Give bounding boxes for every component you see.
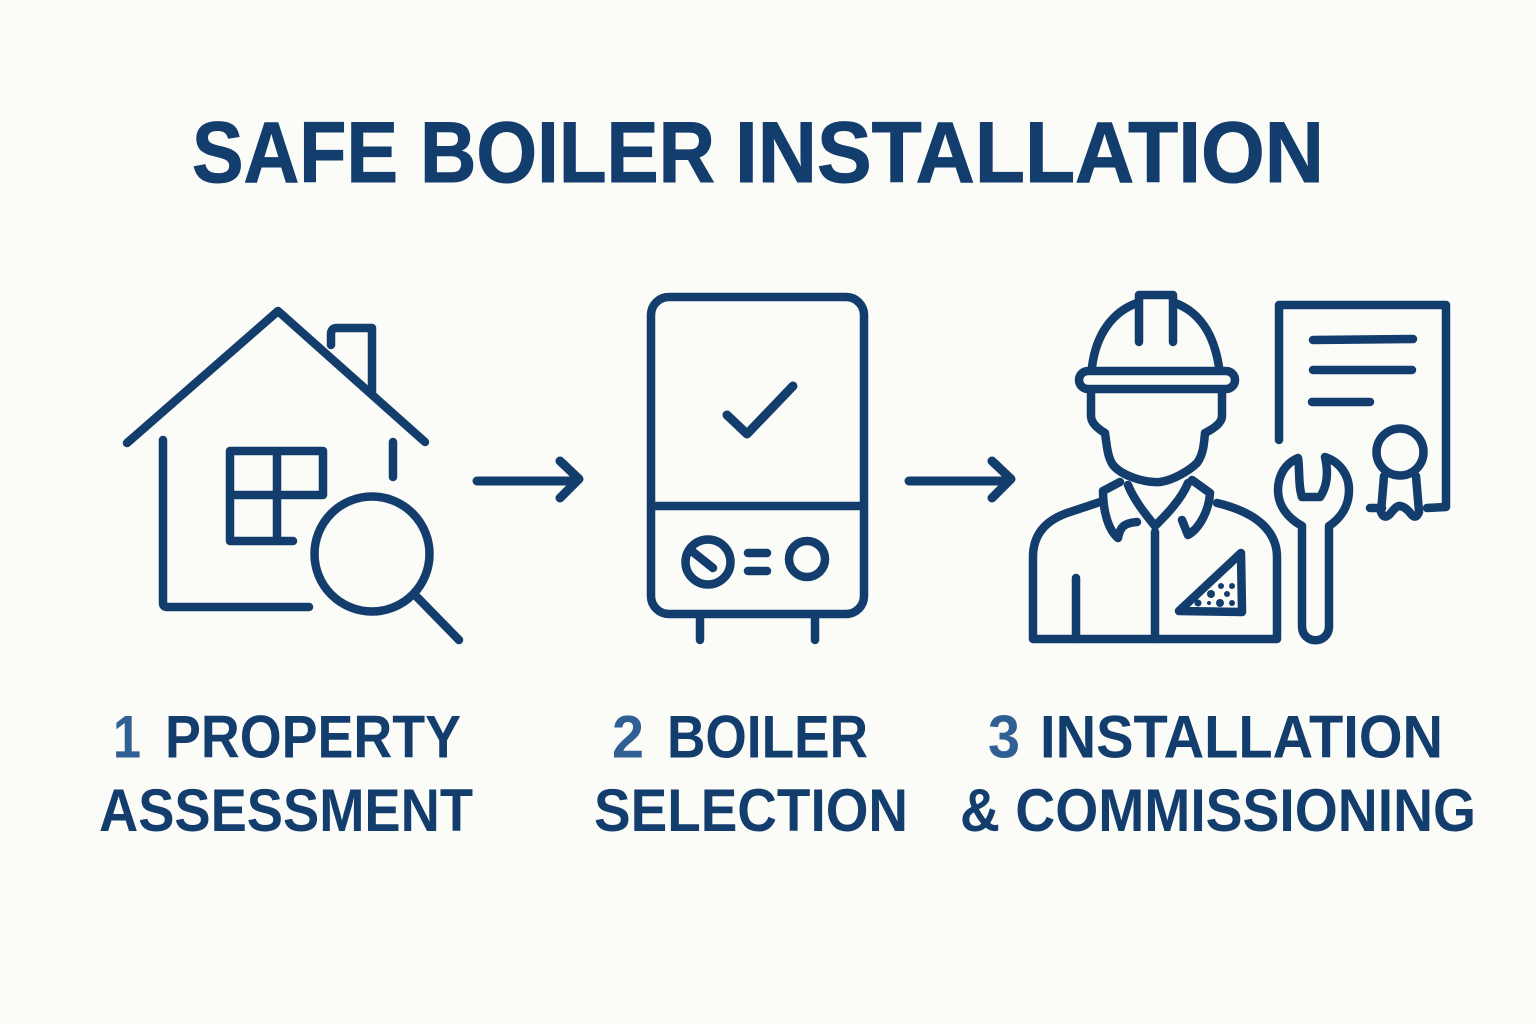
icon: house with magnifier bbox=[127, 311, 459, 640]
step 1 label: 1 bbox=[113, 704, 141, 770]
step 1 label bbox=[99, 704, 473, 844]
step 1 label: ASSESSMENT bbox=[99, 777, 473, 844]
step 3 label: INSTALLATION bbox=[1040, 704, 1443, 770]
helmet bbox=[1092, 303, 1219, 367]
badge bbox=[1179, 553, 1242, 612]
step 2 label: BOILER bbox=[667, 704, 868, 770]
step 3 label bbox=[960, 704, 1476, 844]
title: SAFE bbox=[192, 105, 398, 201]
icon: engineer with certificate and wrench bbox=[1033, 295, 1446, 640]
face bbox=[1091, 392, 1222, 482]
step 3 label: 3 bbox=[988, 704, 1020, 770]
arrow: step 1 to 2 bbox=[477, 461, 579, 498]
badge dots bbox=[1194, 583, 1235, 607]
step 2 label bbox=[594, 704, 908, 844]
wrench bbox=[1278, 457, 1349, 640]
step 2 label: 2 bbox=[612, 704, 644, 770]
collar bbox=[1103, 482, 1137, 538]
title: INSTALLATION bbox=[735, 105, 1324, 201]
seal bbox=[1376, 428, 1424, 476]
step 1 label: PROPERTY bbox=[165, 704, 461, 770]
certificate bbox=[1279, 305, 1446, 508]
step 3 label: & COMMISSIONING bbox=[960, 777, 1476, 844]
arrow: step 2 to 3 bbox=[909, 461, 1011, 498]
title: BOILER bbox=[420, 105, 715, 201]
step 2 label: SELECTION bbox=[594, 777, 908, 844]
icon: boiler bbox=[651, 297, 864, 640]
title bbox=[192, 105, 1324, 201]
torso bbox=[1033, 502, 1277, 639]
